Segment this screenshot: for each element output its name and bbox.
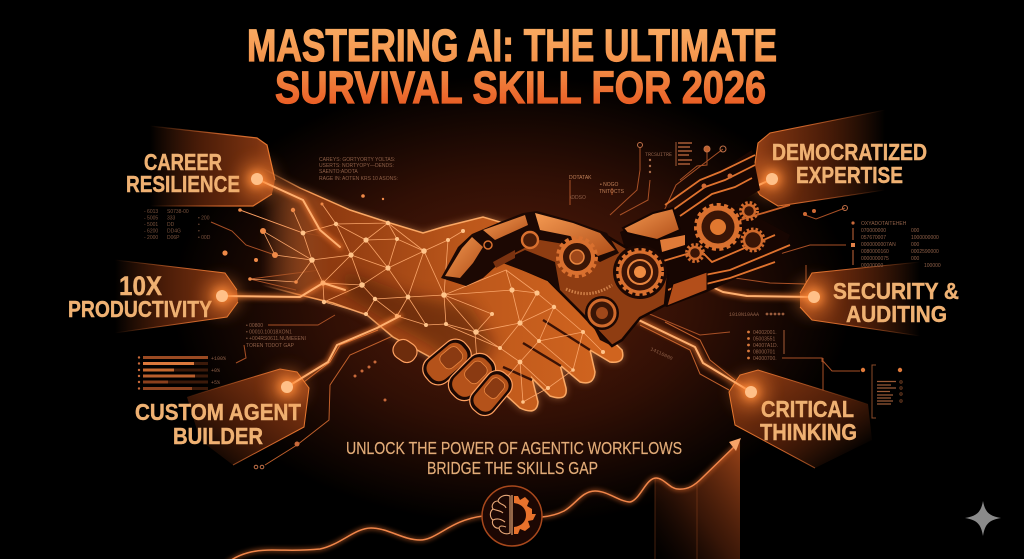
data readout: top right mini list <box>638 142 692 173</box>
data readout: left upper: • <box>198 222 200 228</box>
panel: custom agent builder <box>135 369 309 465</box>
data readout: robot labels <box>569 175 625 201</box>
palm <box>505 222 668 346</box>
data readout: right: 000 <box>911 256 920 262</box>
label: critical thinking: THINKING <box>760 419 857 445</box>
data readout: top centre: RAGE IN: AOTEN KRS 10 ASONS: <box>319 176 398 182</box>
data readout: lower right list: 04007A1D. <box>753 343 778 349</box>
bright connector lines <box>222 179 814 392</box>
data readout: left upper: 333 <box>167 216 176 222</box>
data readout: right: 057670007 <box>861 235 886 241</box>
cuff plate <box>623 208 680 240</box>
data readout: right: 100000 <box>924 263 941 269</box>
label: security and auditing <box>833 278 959 327</box>
subtitle: UNLOCK THE POWER OF AGENTIC WORKFLOWS <box>346 438 682 458</box>
data readout: binary row <box>729 312 784 318</box>
panel: critical thinking <box>729 370 872 468</box>
data readout: under 10x: • 00800 <box>246 323 263 329</box>
icon: brain and gear badge <box>482 486 542 546</box>
robot forearm <box>620 150 790 307</box>
data readout: robot labels: • NOGO <box>600 182 619 188</box>
data readout: left upper: • 200 <box>198 216 210 222</box>
data readout: top centre: CAREYS: GORTYORTY YOLTAS: <box>319 157 395 163</box>
gear half <box>514 496 536 534</box>
label: 10x productivity: 10X <box>119 271 162 301</box>
finger gaps <box>503 320 590 380</box>
data readout: lower right list: 08000701 <box>753 350 775 356</box>
brain <box>490 495 510 534</box>
label: democratized expertise: DEMOCRATIZED <box>772 139 927 165</box>
data readout: robot labels: TNITOCTS <box>599 189 625 195</box>
data readout: left upper: - 6013 <box>144 209 158 215</box>
label: 10x productivity <box>68 271 212 322</box>
dark palm shading <box>345 270 495 380</box>
data readout: left upper: - 5001 <box>144 222 158 228</box>
lower plate <box>667 272 707 306</box>
icon: sparkle watermark <box>965 501 1001 536</box>
title <box>247 20 777 113</box>
readout bullets: lower right <box>747 331 750 359</box>
label: custom agent builder: BUILDER <box>173 423 263 449</box>
data readout: right: 070000000 <box>861 228 886 234</box>
mesh lines <box>240 204 603 408</box>
data readout: robot labels: \DDSO <box>570 195 586 201</box>
title: MASTERING AI: THE ULTIMATE <box>247 20 777 71</box>
mini bar chart: +0% <box>211 368 220 374</box>
mini panel: right of critical thinking <box>861 365 902 418</box>
data readout: right: 0002590000 <box>911 249 939 255</box>
data readout: left upper: • <box>198 228 200 234</box>
data readout: right: 0000000075 <box>861 256 889 262</box>
data readout: left upper: • 00D <box>198 235 211 241</box>
data readout: top right mini list: TRCSUITRE <box>645 152 672 158</box>
label: democratized expertise: EXPERTISE <box>796 162 903 188</box>
decorative small nodes: 14116000 <box>649 346 673 362</box>
data readout: top centre: SAENTO:ADOTA <box>319 169 358 175</box>
data readout: right: 0080000160 <box>861 249 889 255</box>
data readout: right: 0000000007AN <box>861 242 896 248</box>
data readout: left upper: - 2000 <box>144 235 158 241</box>
mini bar chart <box>138 356 226 390</box>
label: security and auditing: SECURITY & <box>833 278 959 304</box>
label: career resilience: RESILIENCE <box>126 171 240 197</box>
dark joint band <box>500 250 612 346</box>
panel: 10x productivity <box>68 260 238 333</box>
node dots <box>204 161 832 410</box>
data readout: right: 1000000000 <box>911 235 939 241</box>
data readout: top centre: USERTS: NORTYOPY—DENDS: <box>319 163 394 169</box>
human hand: polygon mesh <box>222 168 623 411</box>
panel: career resilience <box>126 126 275 206</box>
data readout: right <box>861 221 941 269</box>
palm gears <box>558 238 596 276</box>
arm gears small <box>689 205 762 259</box>
data readout: top centre <box>319 157 398 182</box>
readout markers: right <box>851 221 855 265</box>
label: career resilience <box>126 149 240 197</box>
data readout: lower right list <box>753 330 784 362</box>
data readout: under 10x <box>246 323 306 349</box>
data readout: robot labels: DOTATAK <box>569 175 592 181</box>
data readout: under 10x: TOREN TODOT GAP <box>246 343 295 349</box>
label: critical thinking: CRITICAL <box>761 396 854 422</box>
data readout: left upper: DD4G <box>167 228 181 234</box>
data readout: right: 000 <box>911 228 920 234</box>
data readout: left upper: - 5005 <box>144 216 158 222</box>
label: democratized expertise <box>772 139 927 188</box>
thin circuit traces <box>211 148 860 465</box>
data readout: under 10x: • 00010.10018XON1 <box>246 330 292 336</box>
title: SURVIVAL SKILL FOR 2026 <box>275 62 766 113</box>
decorative small nodes <box>254 146 847 469</box>
subtitle: BRIDGE THE SKILLS GAP <box>427 458 598 478</box>
data readout: binary row: 1010N10AAA <box>729 312 759 318</box>
data readout: lower right list: 04002001. <box>753 330 777 336</box>
thumb plates <box>441 211 619 286</box>
label: custom agent builder: CUSTOM AGENT <box>135 399 301 425</box>
label: critical thinking <box>760 396 857 445</box>
label: 10x productivity: PRODUCTIVITY <box>68 296 212 322</box>
subtitle <box>346 438 682 478</box>
mini bar chart: +5% <box>211 380 220 386</box>
growth line chart with arrow <box>227 438 741 559</box>
robot hand <box>441 211 668 346</box>
robot curled fingers <box>389 334 517 420</box>
mini bar chart: +100% <box>211 356 226 362</box>
data readout: lower right list: 05003551 <box>753 336 775 342</box>
data readout: right: 000 <box>911 242 920 248</box>
label: custom agent builder <box>135 399 301 449</box>
panel: security and auditing <box>800 262 959 336</box>
data readout: right: OXYADOTAITEHEH <box>861 221 907 227</box>
label: career resilience: CAREER <box>144 149 222 175</box>
data readout: left upper: D06P <box>167 235 180 241</box>
mesh nodes <box>301 221 605 404</box>
data readout: right: 00000000 <box>861 263 883 269</box>
data readout: under 10x: • +004RS0611.NUMEEENI <box>246 336 306 342</box>
panel: democratized expertise <box>752 110 927 206</box>
data readout: left upper <box>144 209 211 241</box>
label: security and auditing: AUDITING <box>846 301 947 327</box>
arrowhead <box>729 438 741 451</box>
data readout: left upper: - 6200 <box>144 228 158 234</box>
data readout: left upper: S0738-00 <box>167 209 189 215</box>
arm gear large <box>699 208 737 246</box>
data readout: lower right list: 04000700. <box>753 356 777 362</box>
data readout: left upper: DD <box>167 222 175 228</box>
